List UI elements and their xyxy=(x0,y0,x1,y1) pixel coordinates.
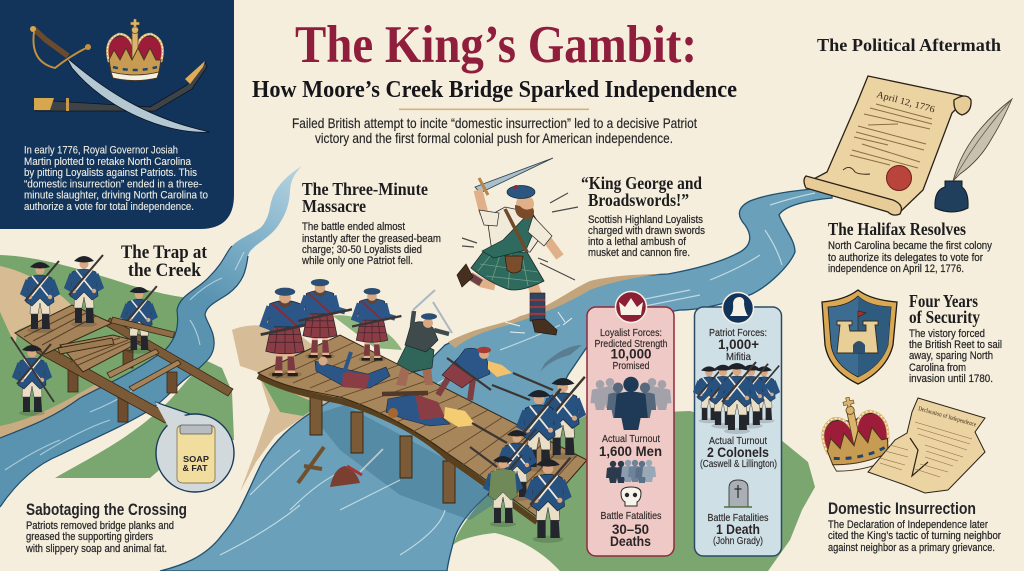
text: The Halifax Resolves: independence on April 12, 1776. xyxy=(828,263,964,275)
intro text: “domestic insurrection” ended in a three- xyxy=(24,178,202,190)
text: Four Years of Security xyxy=(909,291,1002,385)
panel: loyalist forces: Battle Fatalities xyxy=(600,511,662,522)
text: Four Years of Security: Four Years xyxy=(909,291,978,311)
hero: charging highlander xyxy=(457,158,560,335)
river: main wide river xyxy=(160,187,832,571)
pouch xyxy=(505,256,523,273)
icon: fallen crown xyxy=(816,391,894,475)
panel: patriot forces: Battle Fatalities xyxy=(708,513,768,524)
icon: predicted crowd silhouettes xyxy=(591,377,671,430)
panel: patriot forces: 1,000+ xyxy=(718,337,759,352)
cross planks xyxy=(107,349,181,391)
text: King George and Broadswords: “King George and xyxy=(581,173,702,193)
icon: gravestone xyxy=(724,480,752,507)
text: The Halifax Resolves: to authorize its delegates to vote for xyxy=(828,252,983,264)
piers xyxy=(310,396,455,503)
tan bank by the upper river xyxy=(448,274,660,348)
panel: loyalist forces: Loyalist Forces: xyxy=(600,328,662,339)
panel: loyalist forces: 1,600 Men xyxy=(599,444,662,459)
landscape: hill behind centre xyxy=(333,315,402,350)
forward arm xyxy=(546,238,560,257)
soldier carrying plank xyxy=(111,286,175,354)
text: The Three-Minute Massacre xyxy=(301,179,441,267)
splash under charging foot xyxy=(505,312,572,333)
text: King George and Broadswords: into a lethal ambush of xyxy=(588,236,687,248)
text: The Halifax Resolves: North Carolina became the first colony xyxy=(828,240,992,252)
text: Sabotaging the Crossing: Sabotaging the Crossing xyxy=(26,501,187,519)
muzzle flash upper xyxy=(488,361,512,377)
text: Domestic Insurrection: Domestic Insurrection xyxy=(828,500,976,518)
heading: The Political Aftermath: The Political Aftermath xyxy=(817,35,1001,55)
bridge girders xyxy=(36,318,233,423)
icon: crown badge xyxy=(616,292,646,322)
text: King George and Broadswords: charged with drawn swords xyxy=(588,225,705,237)
panel: loyalist forces: 10,000 xyxy=(610,346,652,362)
illustration: sabotaged bridge xyxy=(15,305,233,423)
panel: loyalist forces: 30–50 xyxy=(612,522,649,537)
landscape: lower-left green bank xyxy=(55,360,234,478)
text: Sabotaging the Crossing xyxy=(25,501,187,555)
summary: victory and the first formal colonial push for American independence. xyxy=(315,131,673,146)
icon: torn Declaration: Declaration of Independence xyxy=(917,405,977,428)
icon: Halifax scroll: April 12, 1776 xyxy=(875,90,936,115)
callout: soap and fat jar: SOAP xyxy=(183,454,210,464)
patriot officer xyxy=(528,458,570,543)
soldier in river xyxy=(330,449,383,487)
soldier with musket xyxy=(11,337,54,416)
summary: Failed British attempt to incite “domestic insurrection” led to a decisive Patriot xyxy=(292,116,697,131)
text: Domestic Insurrection xyxy=(828,500,1001,554)
raised arm xyxy=(478,190,484,214)
text: The Halifax Resolves xyxy=(828,219,992,275)
panel: patriot forces: Actual Turnout xyxy=(709,436,767,447)
highlander with sword xyxy=(396,290,452,386)
intro text: In early 1776, Royal Governor Josiah xyxy=(24,144,178,156)
panel: patriot forces: Mifitia xyxy=(726,352,751,363)
icon: bell badge xyxy=(722,292,754,324)
text: Four Years of Security: of Security xyxy=(909,307,980,327)
text: The Three-Minute Massacre: The battle ended almost xyxy=(302,221,406,233)
bridge piers xyxy=(68,350,177,422)
patriot firing line xyxy=(470,373,585,472)
intro text: by pitting Loyalists against Patriots. This xyxy=(24,167,198,179)
text: Domestic Insurrection: The Declaration of Independence later xyxy=(828,519,988,531)
icon: royal crown xyxy=(107,19,163,80)
text: King George and Broadswords: Broadswords!” xyxy=(588,190,689,210)
deck plank seams xyxy=(24,309,134,366)
flying musket balls xyxy=(462,193,578,280)
front leg xyxy=(532,282,537,297)
text: King George and Broadswords: Scottish Highland Loyalists xyxy=(588,214,703,226)
bridge deck upper xyxy=(15,305,112,354)
intro text: minute slaughter, driving North Carolina to xyxy=(24,190,208,202)
heading: The Trap at the Creek: the Creek xyxy=(128,261,202,281)
muzzle flash lower xyxy=(444,407,476,427)
text: Four Years of Security: the British Reet to sail xyxy=(909,339,1002,351)
text: The Three-Minute Massacre: charge; 30-50 Loyalists died xyxy=(302,244,422,256)
soldier 1 xyxy=(23,261,59,333)
icon: skull xyxy=(621,487,641,506)
landscape: tan shore xyxy=(0,382,110,438)
summary xyxy=(292,116,697,146)
text: Four Years of Security: Carolina from xyxy=(909,362,966,374)
panel: patriot forces xyxy=(694,292,782,556)
panel: navy introduction xyxy=(0,0,234,229)
panel: patriot forces: (Caswell & Lillington) xyxy=(700,459,777,470)
heading: The Trap at the Creek xyxy=(121,243,208,281)
panel: patriot forces: 2 Colonels xyxy=(707,445,769,460)
icon: Halifax scroll xyxy=(804,76,971,215)
subtitle: How Moore’s Creek Bridge Sparked Independence xyxy=(252,77,737,103)
icon: sabre and scabbard xyxy=(30,26,210,132)
text: King George and Broadswords xyxy=(581,173,705,259)
text: The Halifax Resolves: The Halifax Resolves xyxy=(828,219,966,239)
text: King George and Broadswords: musket and cannon fire. xyxy=(588,247,690,259)
panel: loyalist forces: Actual Turnout xyxy=(602,434,660,445)
bridge deck lower xyxy=(60,335,140,372)
panel: loyalist forces xyxy=(587,292,674,556)
panel: loyalist forces: Predicted Strength xyxy=(594,339,668,350)
soldier 2 xyxy=(67,255,103,327)
floating musket in river xyxy=(298,447,324,483)
panel: patriot forces: Patriot Forces: xyxy=(709,328,767,339)
landscape: centre bank xyxy=(232,325,350,492)
callout: soap and fat jar: & FAT xyxy=(182,463,208,473)
loose plank xyxy=(58,338,114,354)
text: Sabotaging the Crossing: greased the supporting girders xyxy=(26,531,153,543)
text: Four Years of Security: invasion until 1780. xyxy=(909,373,993,385)
landscape: lower-right green hill xyxy=(453,411,815,571)
text: The Three-Minute Massacre: Massacre xyxy=(302,196,366,216)
landscape: tan ground xyxy=(0,266,72,345)
icon: quill and inkwell xyxy=(935,99,1012,212)
panel: loyalist forces: Promised xyxy=(612,361,650,372)
kilt xyxy=(471,252,544,290)
deck xyxy=(258,335,587,517)
head xyxy=(516,195,534,213)
text: Four Years of Security: The vistory forced xyxy=(909,328,985,340)
text: Sabotaging the Crossing: Patriots removed bridge planks and xyxy=(26,520,174,532)
text: Domestic Insurrection: cited the King’s tactic of turning neighbor xyxy=(828,530,1001,542)
intro text: Martin plotted to retake North Carolina xyxy=(24,156,191,168)
text: The Three-Minute Massacre: instantly after the greased-beam xyxy=(302,233,441,245)
icon: castle shield xyxy=(822,290,897,384)
fallen loyalist xyxy=(315,352,390,389)
panel: loyalist forces: Deaths xyxy=(610,534,651,549)
icon: patriot troops xyxy=(695,362,779,434)
river: upper creek xyxy=(0,166,302,507)
fallen loyalist face down xyxy=(382,393,450,426)
landscape: centre green xyxy=(257,372,320,416)
title: The King’s Gambit: xyxy=(295,16,697,74)
green-coated militia xyxy=(486,455,522,527)
text: Sabotaging the Crossing: with slippery soap and animal fat. xyxy=(25,543,167,555)
highlander 3 xyxy=(352,288,401,362)
icon: torn Declaration xyxy=(868,398,985,493)
text: Four Years of Security: away, sparing North xyxy=(909,350,993,362)
plank seams xyxy=(276,342,577,510)
trailing leg xyxy=(470,276,495,286)
plaid sash xyxy=(482,211,538,258)
highlander 1 xyxy=(261,288,321,378)
panel: patriot forces: 1 Death xyxy=(716,522,760,537)
icon: actual turnout silhouettes xyxy=(606,460,656,483)
intro text xyxy=(24,144,208,213)
intro text: authorize a vote for total independence. xyxy=(24,201,194,213)
sword xyxy=(475,158,553,193)
landscape: left green bank xyxy=(0,255,190,438)
heading: The Trap at the Creek: The Trap at xyxy=(121,243,208,263)
text: The Three-Minute Massacre: while only one Patriot fell. xyxy=(301,255,413,267)
shirt torso xyxy=(487,207,540,252)
shoulder strap xyxy=(505,209,527,252)
illustration: main battle bridge xyxy=(258,335,587,522)
patriot musketeer xyxy=(500,429,536,501)
highlander crouching xyxy=(438,347,491,400)
callout: soap and fat jar xyxy=(155,402,234,492)
panel: patriot forces: (John Grady) xyxy=(713,536,763,547)
underside beam xyxy=(258,376,537,522)
text: The Three-Minute Massacre: The Three-Minute xyxy=(302,179,428,199)
highlander 2 xyxy=(298,279,352,360)
